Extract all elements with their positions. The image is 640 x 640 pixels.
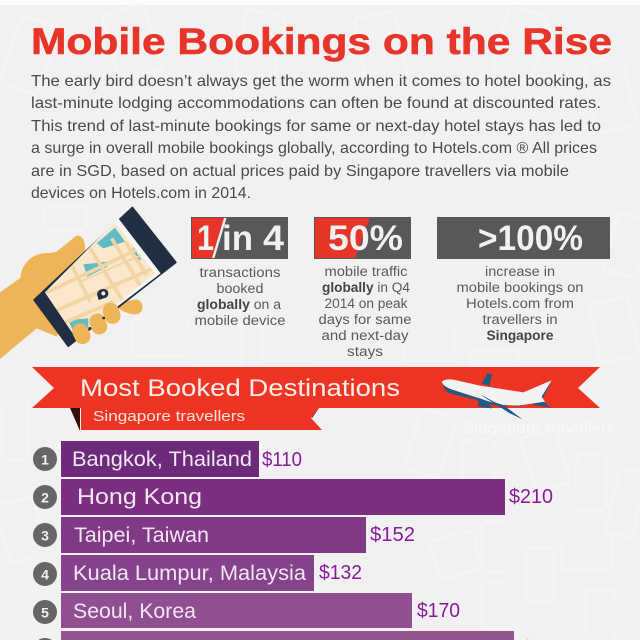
stat: 1 in 4: 1 bbox=[197, 219, 214, 258]
intro text block: are in SGD, based on actual prices paid by Singapore travellers via mobile bbox=[31, 163, 569, 180]
row 4: Kuala Lumpur bbox=[33, 555, 362, 591]
row 5: Seoul: $170 bbox=[417, 600, 460, 622]
icon: hand holding phone with map bbox=[0, 208, 176, 359]
stat: >100%: Hotels.com from bbox=[466, 296, 574, 311]
stat: >100%: increase in bbox=[485, 264, 555, 279]
faint repeated caption: Singapore travellers bbox=[463, 420, 615, 437]
stat: 50%: stays bbox=[347, 344, 383, 359]
row 5: Seoul bbox=[33, 593, 460, 628]
stat: >100%: Singapore bbox=[486, 328, 554, 343]
row 2: Hong Kong bbox=[33, 479, 553, 515]
row 4: Kuala Lumpur: 4 bbox=[41, 566, 49, 582]
stat: 1 in 4: globally on a bbox=[197, 297, 282, 312]
row 1: Bangkok: $110 bbox=[262, 449, 302, 471]
row 3: Taipei: $152 bbox=[370, 524, 415, 546]
bar chart: destinations and prices bbox=[33, 441, 553, 640]
stat: >100%: travellers in bbox=[482, 312, 558, 327]
intro text block: last-minute lodging accommodations can often be found at discounted rates. bbox=[31, 95, 601, 112]
stat: 50%: 50% bbox=[328, 219, 403, 258]
stat: 1 in 4: transactions bbox=[200, 265, 281, 280]
row 6: cropped bar bbox=[33, 631, 533, 640]
stat: >100%: mobile bookings on bbox=[456, 280, 584, 295]
row 1: Bangkok: 1 bbox=[41, 452, 49, 468]
intro text block: The early bird doesn’t always get the worm when it comes to hotel booking, as bbox=[31, 73, 611, 90]
stat: 50%: days for same bbox=[318, 312, 412, 327]
stat: 1 in 4: mobile device bbox=[194, 313, 286, 328]
stat: 1 in 4 bbox=[191, 217, 288, 328]
icon: airplane bbox=[442, 373, 552, 419]
stat: >100% bbox=[437, 217, 610, 343]
stat: 50%: globally in Q4 bbox=[322, 280, 410, 295]
row 2: Hong Kong: Hong Kong bbox=[77, 484, 202, 509]
row 5: Seoul: Seoul, Korea bbox=[73, 600, 196, 623]
row 3: Taipei bbox=[33, 517, 415, 553]
stat: 1 in 4: booked bbox=[216, 281, 264, 296]
intro text block: a surge in overall mobile bookings globally, according to Hotels.com ® All prices bbox=[31, 140, 597, 157]
row 3: Taipei: 3 bbox=[41, 528, 49, 544]
stat: 50%: and next-day bbox=[322, 328, 409, 343]
row 4: Kuala Lumpur: Kuala Lumpur, Malaysia bbox=[73, 562, 306, 585]
stat: >100%: >100% bbox=[478, 219, 583, 258]
intro text block: This trend of last-minute bookings for same or next-day hotel stays has led to bbox=[31, 118, 601, 135]
row 4: Kuala Lumpur: $132 bbox=[319, 562, 362, 584]
banner: most booked destinations: Most Booked Destinations bbox=[80, 375, 400, 402]
stat: 1 in 4: in bbox=[222, 219, 253, 258]
banner: most booked destinations bbox=[32, 367, 600, 431]
title: Mobile Bookings on the Rise bbox=[31, 21, 612, 62]
banner: most booked destinations: Singapore travellers bbox=[93, 408, 245, 425]
intro text block: devices on Hotels.com in 2014. bbox=[31, 185, 251, 202]
row 2: Hong Kong: 2 bbox=[41, 490, 49, 506]
stat: 50%: mobile traffic bbox=[324, 264, 408, 279]
stat: 1 in 4: 4 bbox=[263, 219, 285, 258]
intro text block bbox=[31, 73, 611, 202]
stat: 50% bbox=[314, 217, 412, 359]
row 2: Hong Kong: $210 bbox=[509, 486, 553, 508]
row 3: Taipei: Taipei, Taiwan bbox=[74, 524, 209, 547]
row 5: Seoul: 5 bbox=[41, 604, 49, 620]
stat: 50%: 2014 on peak bbox=[324, 296, 408, 311]
row 1: Bangkok: Bangkok, Thailand bbox=[72, 448, 252, 471]
row 1: Bangkok bbox=[33, 441, 302, 477]
